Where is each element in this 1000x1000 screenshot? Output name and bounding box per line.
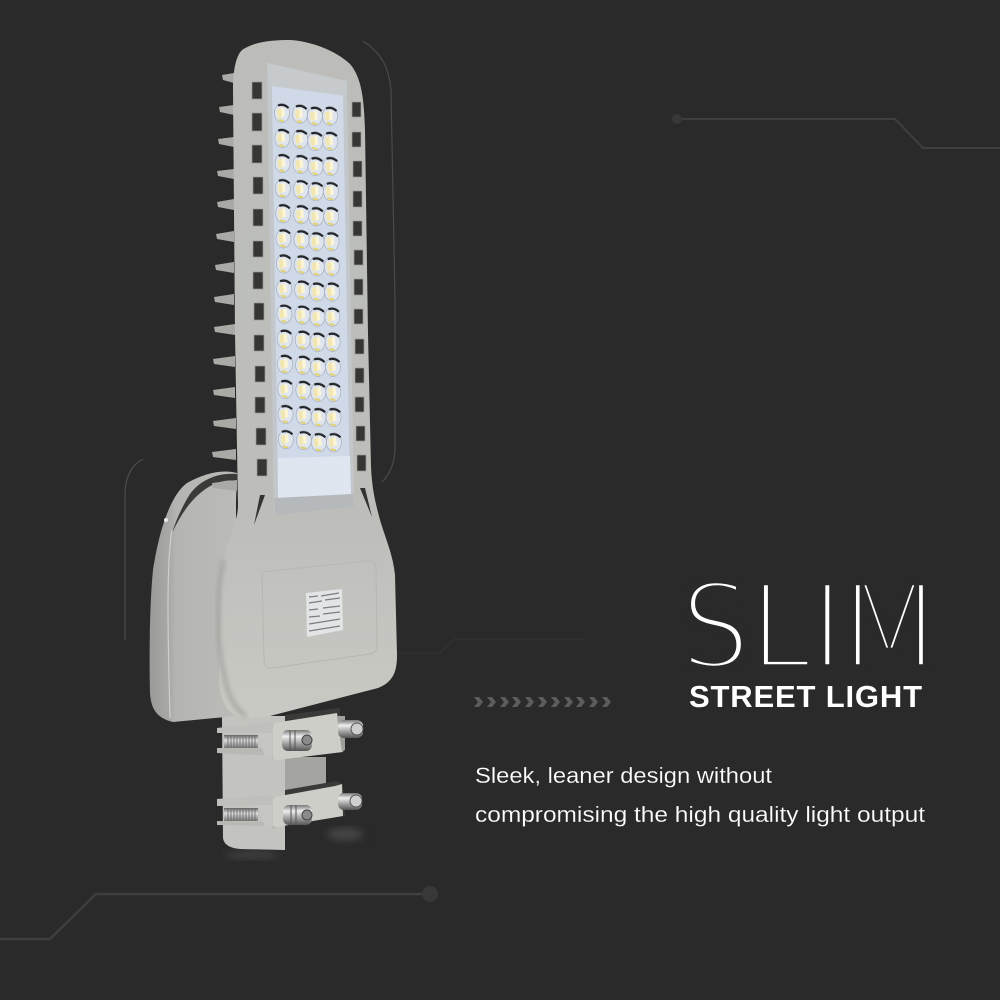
left vent holes: [252, 82, 267, 476]
LED grid: [274, 104, 341, 452]
upper clamp: [217, 713, 363, 760]
circuit line: top right: [672, 114, 1000, 148]
LED module: [267, 63, 354, 515]
curved outline behind lamp top: [363, 41, 395, 482]
mounting bracket: [217, 708, 363, 850]
description text: compromising the high quality light output: [475, 802, 925, 827]
floor reflection: [224, 828, 363, 858]
module top strip: [267, 63, 347, 96]
module bottom strip: [274, 494, 354, 515]
frosted driver window: [278, 456, 351, 498]
cooling fins: [212, 73, 237, 491]
title: SLIM: L: [750, 558, 811, 697]
lamp head body: [219, 40, 397, 718]
title: SLIM: S: [680, 558, 750, 697]
subtitle: STREET LIGHT: STREET LIGHT: [689, 679, 922, 714]
lower face shading: [218, 560, 246, 716]
shoulder slots: [254, 488, 372, 525]
description text: [475, 763, 925, 827]
lower clamp: [217, 781, 362, 830]
product label: [306, 589, 343, 637]
rear housing: [150, 471, 238, 722]
title: SLIM: M: [842, 558, 937, 697]
title: SLIM: I: [811, 558, 844, 697]
circuit line: faint centre: [395, 639, 585, 653]
right vent holes: [352, 102, 366, 471]
circuit line: bottom left: [0, 886, 438, 939]
curved outline behind lamp bottom: [125, 459, 143, 640]
recessed plate: [262, 561, 377, 668]
street light product: [150, 40, 397, 850]
chevron row: [474, 697, 611, 707]
description text: Sleek, leaner design without: [475, 763, 772, 788]
